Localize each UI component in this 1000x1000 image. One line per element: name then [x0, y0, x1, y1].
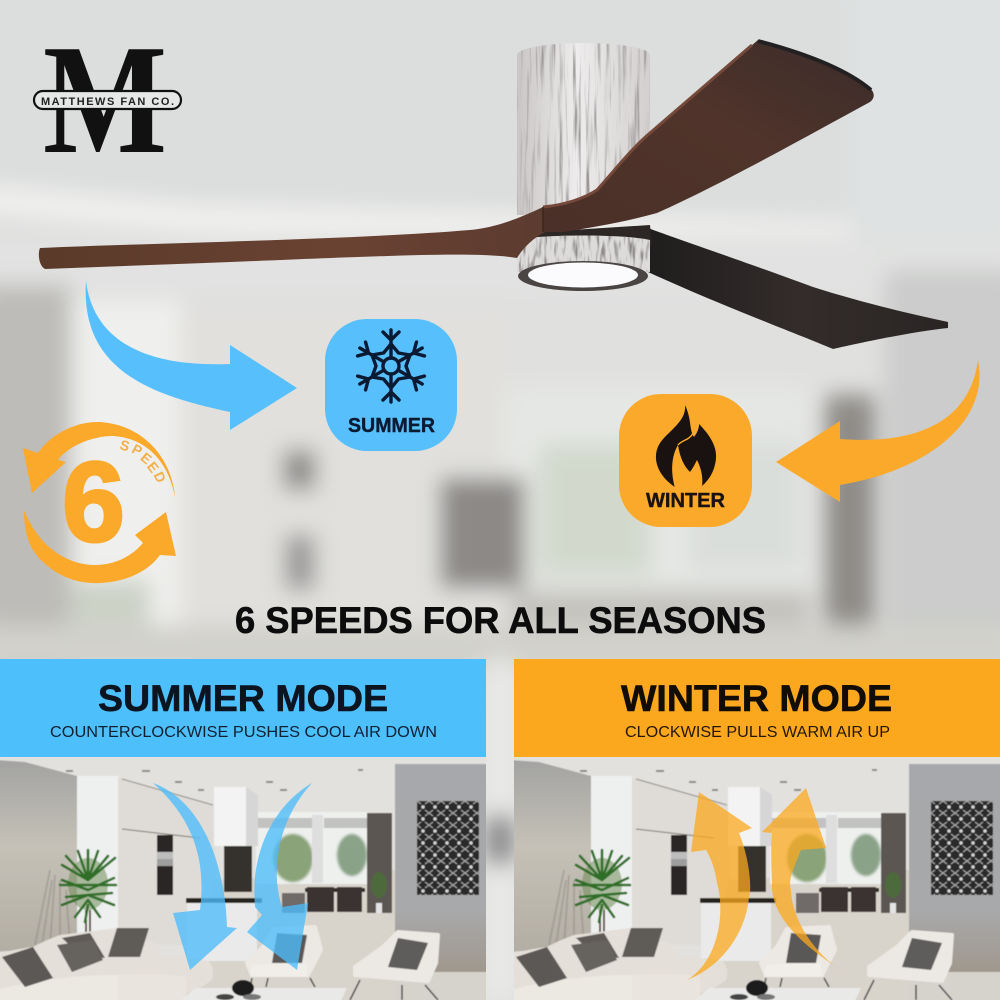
logo: Matthews Fan Co.: MATTHEWS FAN CO.: [41, 96, 174, 108]
hub underside: [520, 225, 652, 245]
winter label: WINTER: [646, 490, 726, 512]
light ring: [517, 236, 650, 272]
winter mode caption: CLOCKWISE PULLS WARM AIR UP: [625, 724, 890, 741]
left long blade: [39, 207, 545, 269]
ceiling fan: [39, 40, 948, 349]
speed label: S: [118, 436, 131, 454]
summer mode caption: COUNTERCLOCKWISE PUSHES COOL AIR DOWN: [50, 724, 437, 741]
photo: winter room with air flow: [511, 755, 1000, 1000]
lower dark blade: [648, 228, 948, 349]
logo: Matthews Fan Co.: M: [43, 12, 167, 186]
icon: snowflake: [356, 330, 426, 402]
arrow: air down right: [247, 783, 312, 970]
photo: summer room with air flow: [0, 755, 489, 1000]
winter mode title: WINTER MODE: [621, 678, 892, 719]
tile: winter: [619, 394, 752, 527]
speed label: D: [151, 469, 169, 485]
summer mode title: SUMMER MODE: [98, 678, 388, 719]
speed label: [118, 436, 169, 485]
panel: winter mode: [514, 659, 1000, 757]
arrow: air up left: [687, 792, 752, 980]
speed label: P: [129, 441, 145, 459]
lower circular arrow: [24, 510, 176, 583]
icon: flame: [656, 405, 716, 488]
speed label: E: [144, 458, 162, 476]
icon: 6 speed badge: [23, 422, 176, 583]
big six: 6: [62, 439, 125, 565]
upper circular arrow: [23, 422, 175, 497]
upper walnut blade: [543, 40, 874, 232]
summer label: SUMMER: [348, 415, 436, 437]
speed label: E: [138, 449, 155, 467]
arrow: summer blue curve: [86, 281, 297, 430]
heading: 6 SPEEDS FOR ALL SEASONS: [235, 600, 766, 641]
tile: summer: [325, 319, 457, 451]
arrow: air up right: [762, 788, 844, 972]
motor housing: [517, 43, 650, 215]
LED light: [518, 261, 648, 291]
panel: summer mode: [0, 659, 486, 757]
arrow: winter orange curve: [776, 360, 980, 502]
arrow: air down left: [153, 783, 237, 970]
